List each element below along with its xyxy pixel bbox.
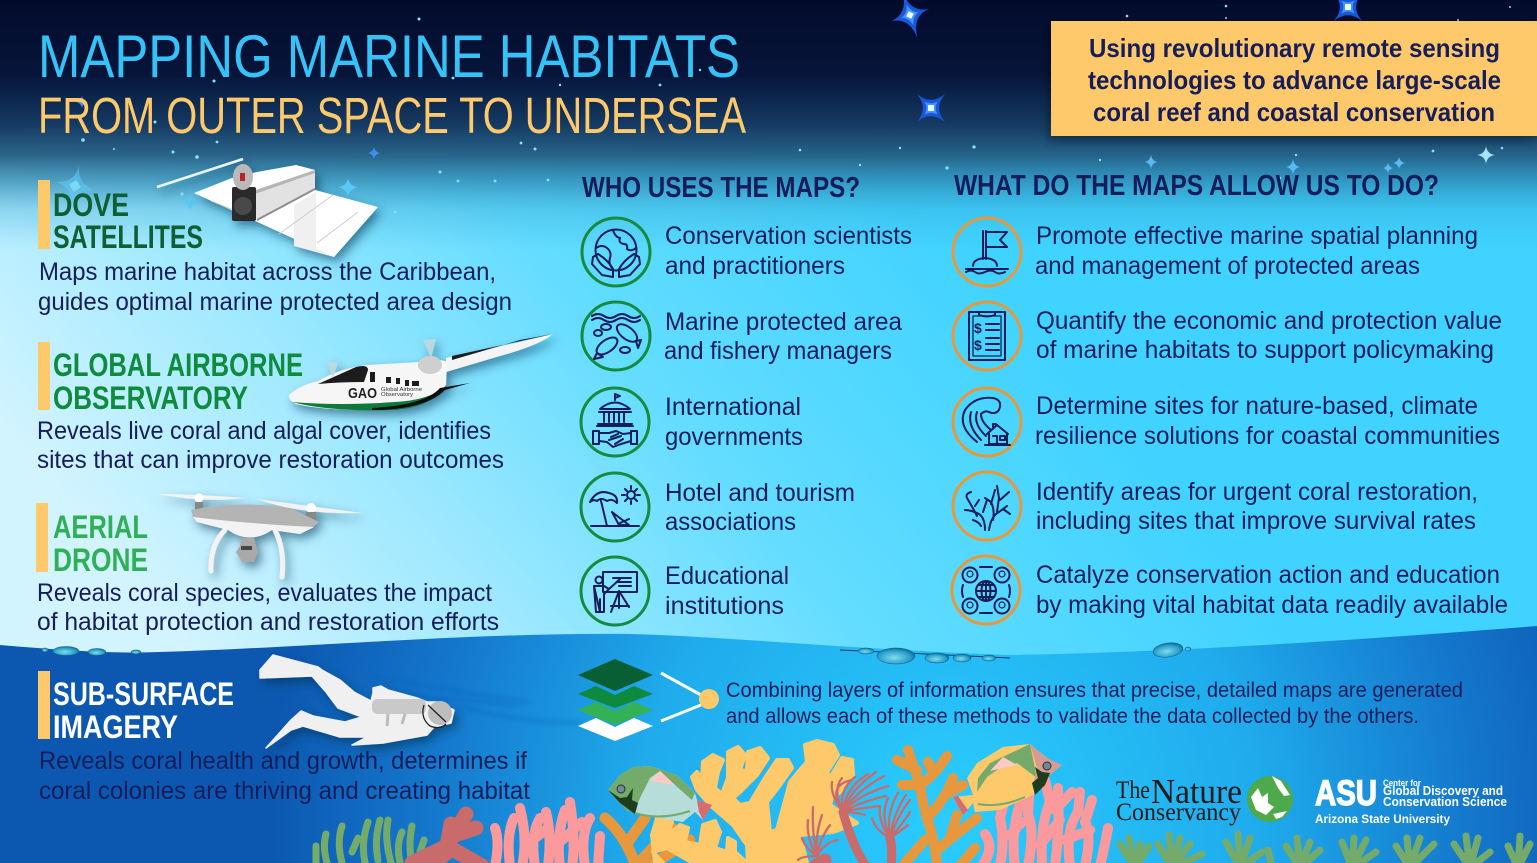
illustration: airplane — [289, 334, 553, 410]
illustration: airplane: Global Airborne — [381, 387, 422, 393]
text: combining layers: and allows each of these methods to validate the data collected by the others. — [726, 705, 1419, 728]
item: conservation scientists: Conservation scientists — [665, 222, 912, 250]
panel: global airborne observatory: OBSERVATORY — [53, 380, 248, 416]
callout: purpose statement: technologies to advance large-scale — [1088, 65, 1501, 95]
item: economic value — [953, 302, 1502, 370]
panel: sub-surface imagery — [38, 671, 530, 805]
heading: what do the maps allow: WHAT DO THE MAPS ALLOW US TO DO? — [954, 170, 1439, 202]
panel: sub-surface imagery: SUB-SURFACE — [53, 676, 234, 712]
panel: dove satellites: guides optimal marine protected area design — [38, 288, 512, 316]
logo: the nature conservancy: Nature — [1151, 772, 1242, 811]
logo: arizona state university: Conservation Science — [1383, 794, 1507, 809]
logo: the nature conservancy — [1116, 772, 1293, 826]
panel: global airborne observatory — [37, 342, 504, 474]
panel: aerial drone: DRONE — [53, 542, 148, 578]
coral: red left — [412, 814, 482, 863]
coral: salmon left — [495, 802, 600, 863]
item: hotel and tourism — [581, 473, 855, 541]
item: economic value: $ — [974, 337, 982, 353]
logo: arizona state university: Arizona State University — [1315, 812, 1450, 826]
panel: global airborne observatory: GLOBAL AIRBORNE — [53, 347, 303, 383]
callout: purpose statement — [1051, 21, 1537, 136]
illustration: green fish — [608, 766, 712, 822]
panel: dove satellites: Maps marine habitat across the Caribbean, — [39, 258, 496, 286]
panel: sub-surface imagery: IMAGERY — [53, 709, 178, 745]
illustration: airplane: Observatory — [381, 392, 414, 398]
coral: orange left — [605, 818, 690, 863]
item: conservation action: by making vital habitat data readily available — [1036, 591, 1508, 619]
panel: aerial drone — [36, 503, 499, 636]
panel: global airborne observatory: Reveals live coral and algal cover, identifies — [37, 417, 491, 445]
heading: who uses the maps: WHO USES THE MAPS? — [582, 172, 860, 204]
item: economic value: Quantify the economic and protection value — [1036, 307, 1502, 335]
illustration: diver — [260, 655, 580, 748]
logo: arizona state university — [1315, 774, 1507, 826]
callout: purpose statement: coral reef and coastal conservation — [1093, 97, 1495, 127]
illustration: dove satellite — [157, 159, 378, 257]
item: climate resilience: Determine sites for nature-based, climate — [1036, 392, 1478, 420]
underwater background — [0, 626, 1537, 863]
title: MAPPING MARINE HABITATS — [38, 23, 740, 90]
panel: aerial drone: AERIAL — [53, 509, 148, 545]
text: combining layers — [726, 679, 1463, 728]
coral: orange right — [897, 750, 977, 863]
logo: the nature conservancy: Conservancy — [1116, 799, 1241, 826]
item: marine managers: Marine protected area — [665, 308, 902, 336]
callout: purpose statement: Using revolutionary remote sensing — [1089, 33, 1500, 63]
panel: aerial drone: of habitat protection and restoration efforts — [37, 608, 499, 636]
item: conservation action: Catalyze conservation action and education — [1036, 561, 1500, 589]
item: governments — [581, 388, 803, 456]
surface bubbles — [42, 641, 1191, 664]
panel: sub-surface imagery: coral colonies are thriving and creating habitat — [39, 777, 530, 805]
item: coral restoration: Identify areas for urgent coral restoration, — [1036, 478, 1478, 506]
item: climate resilience: resilience solutions for coastal communities — [1035, 422, 1500, 450]
item: educational institutions: institutions — [665, 592, 784, 620]
icon: nature conservancy globe — [1247, 776, 1293, 822]
icon: map layers — [578, 659, 719, 741]
title — [38, 23, 746, 144]
item: hotel and tourism: associations — [665, 508, 796, 536]
item: educational institutions: Educational — [665, 562, 789, 590]
coral: green left — [316, 820, 424, 863]
item: conservation action — [952, 556, 1508, 624]
item: conservation scientists — [582, 218, 912, 286]
item: economic value: of marine habitats to support policymaking — [1036, 336, 1494, 364]
item: governments: governments — [665, 423, 803, 451]
glow star beside dove — [51, 162, 99, 210]
illustration: drone — [157, 494, 362, 577]
item: coral restoration — [953, 472, 1478, 540]
item: spatial planning: Promote effective marine spatial planning — [1036, 222, 1478, 250]
logo: arizona state university: Center for — [1383, 778, 1421, 788]
panel: dove satellites: DOVE — [53, 187, 129, 223]
panel: dove satellites — [38, 180, 512, 316]
item: marine managers — [582, 302, 902, 370]
coral: green right seaweed — [1120, 834, 1530, 863]
coral: anemones — [798, 772, 910, 863]
item: marine managers: and fishery managers — [664, 337, 892, 365]
item: conservation scientists: and practitioners — [665, 252, 845, 280]
logo: the nature conservancy: The — [1116, 777, 1150, 804]
panel: global airborne observatory: sites that can improve restoration outcomes — [37, 446, 504, 474]
corals — [316, 741, 1530, 863]
panel: aerial drone: Reveals coral species, evaluates the impact — [37, 579, 492, 607]
item: educational institutions — [581, 557, 789, 625]
list: who uses the maps — [581, 218, 912, 625]
background: sky gradient — [0, 0, 1537, 660]
item: governments: International — [665, 393, 801, 421]
list: what the maps allow — [952, 218, 1508, 624]
panel: dove satellites: SATELLITES — [53, 219, 203, 255]
panel: sub-surface imagery: Reveals coral health and growth, determines if — [39, 747, 527, 775]
illustration: yellow fish — [953, 744, 1062, 815]
logo: arizona state university: Global Discovery and — [1383, 783, 1503, 798]
illustration: airplane: GAO — [348, 385, 377, 402]
item: hotel and tourism: Hotel and tourism — [665, 479, 855, 507]
coral: salmon right — [982, 780, 1108, 863]
stars — [51, 0, 1511, 213]
coral: yellow big — [692, 741, 857, 863]
text: combining layers: Combining layers of information ensures that precise, detailed maps are generated — [726, 679, 1463, 702]
item: coral restoration: including sites that improve survival rates — [1036, 507, 1476, 535]
item: economic value: $ — [974, 320, 982, 336]
title: FROM OUTER SPACE TO UNDERSEA — [38, 87, 746, 144]
logo: arizona state university: ASU — [1315, 774, 1377, 813]
item: spatial planning — [953, 218, 1478, 286]
item: climate resilience — [953, 388, 1500, 456]
item: spatial planning: and management of protected areas — [1035, 252, 1420, 280]
